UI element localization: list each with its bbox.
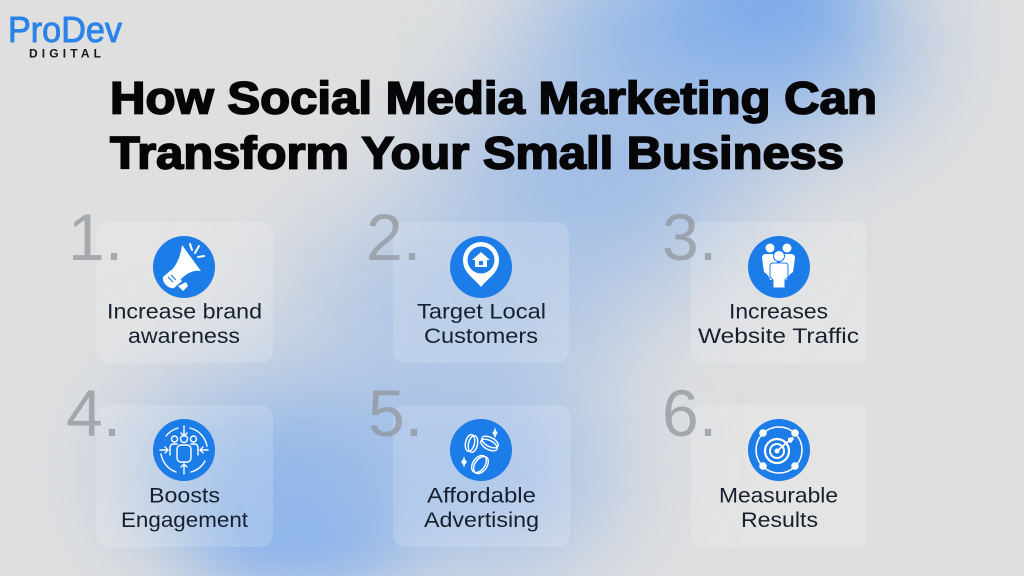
label (121, 484, 248, 532)
logo: ProDev Digital: DIGITAL (29, 46, 101, 60)
label: Engagement (121, 509, 248, 532)
panel: 4 boosts engagement (66, 376, 273, 547)
number 5: 5. (368, 376, 423, 450)
label: Website Traffic (698, 325, 859, 348)
icon: people with arrows (153, 419, 215, 481)
number 6: 6. (662, 376, 717, 450)
panel: 5 affordable advertising (368, 376, 570, 547)
number 4: 4. (66, 376, 121, 450)
icon: target with orbit (748, 419, 810, 481)
label: Increases (729, 300, 828, 324)
panel: 6 measurable results (662, 376, 867, 547)
label: Measurable (719, 484, 838, 508)
label: awareness (128, 325, 240, 348)
logo: ProDev Digital: ProDev (8, 9, 122, 50)
label (107, 300, 262, 348)
label: Customers (424, 325, 538, 348)
label (417, 300, 546, 348)
label: Increase brand (107, 300, 262, 324)
label: Target Local (417, 300, 546, 324)
icon: group of people (748, 236, 810, 298)
label: Affordable (427, 484, 536, 508)
label (698, 300, 859, 348)
label: Boosts (149, 484, 220, 508)
panel: 2 target local customers (366, 200, 569, 363)
label: Advertising (424, 509, 539, 532)
panel: 3 increases website traffic (662, 200, 867, 363)
title (110, 72, 877, 178)
label (424, 484, 539, 532)
label: Results (741, 509, 818, 532)
label (719, 484, 838, 532)
icon: coins and sparkles (450, 419, 512, 481)
title: Transform Your Small Business (110, 128, 844, 178)
number 2: 2. (366, 200, 421, 274)
panel: 1 increase brand awareness (68, 200, 273, 363)
icon: megaphone (153, 236, 215, 298)
title: How Social Media Marketing Can (110, 72, 877, 124)
icon: location pin with house (450, 236, 512, 298)
number 3: 3. (662, 200, 717, 274)
number 1: 1. (68, 200, 123, 274)
